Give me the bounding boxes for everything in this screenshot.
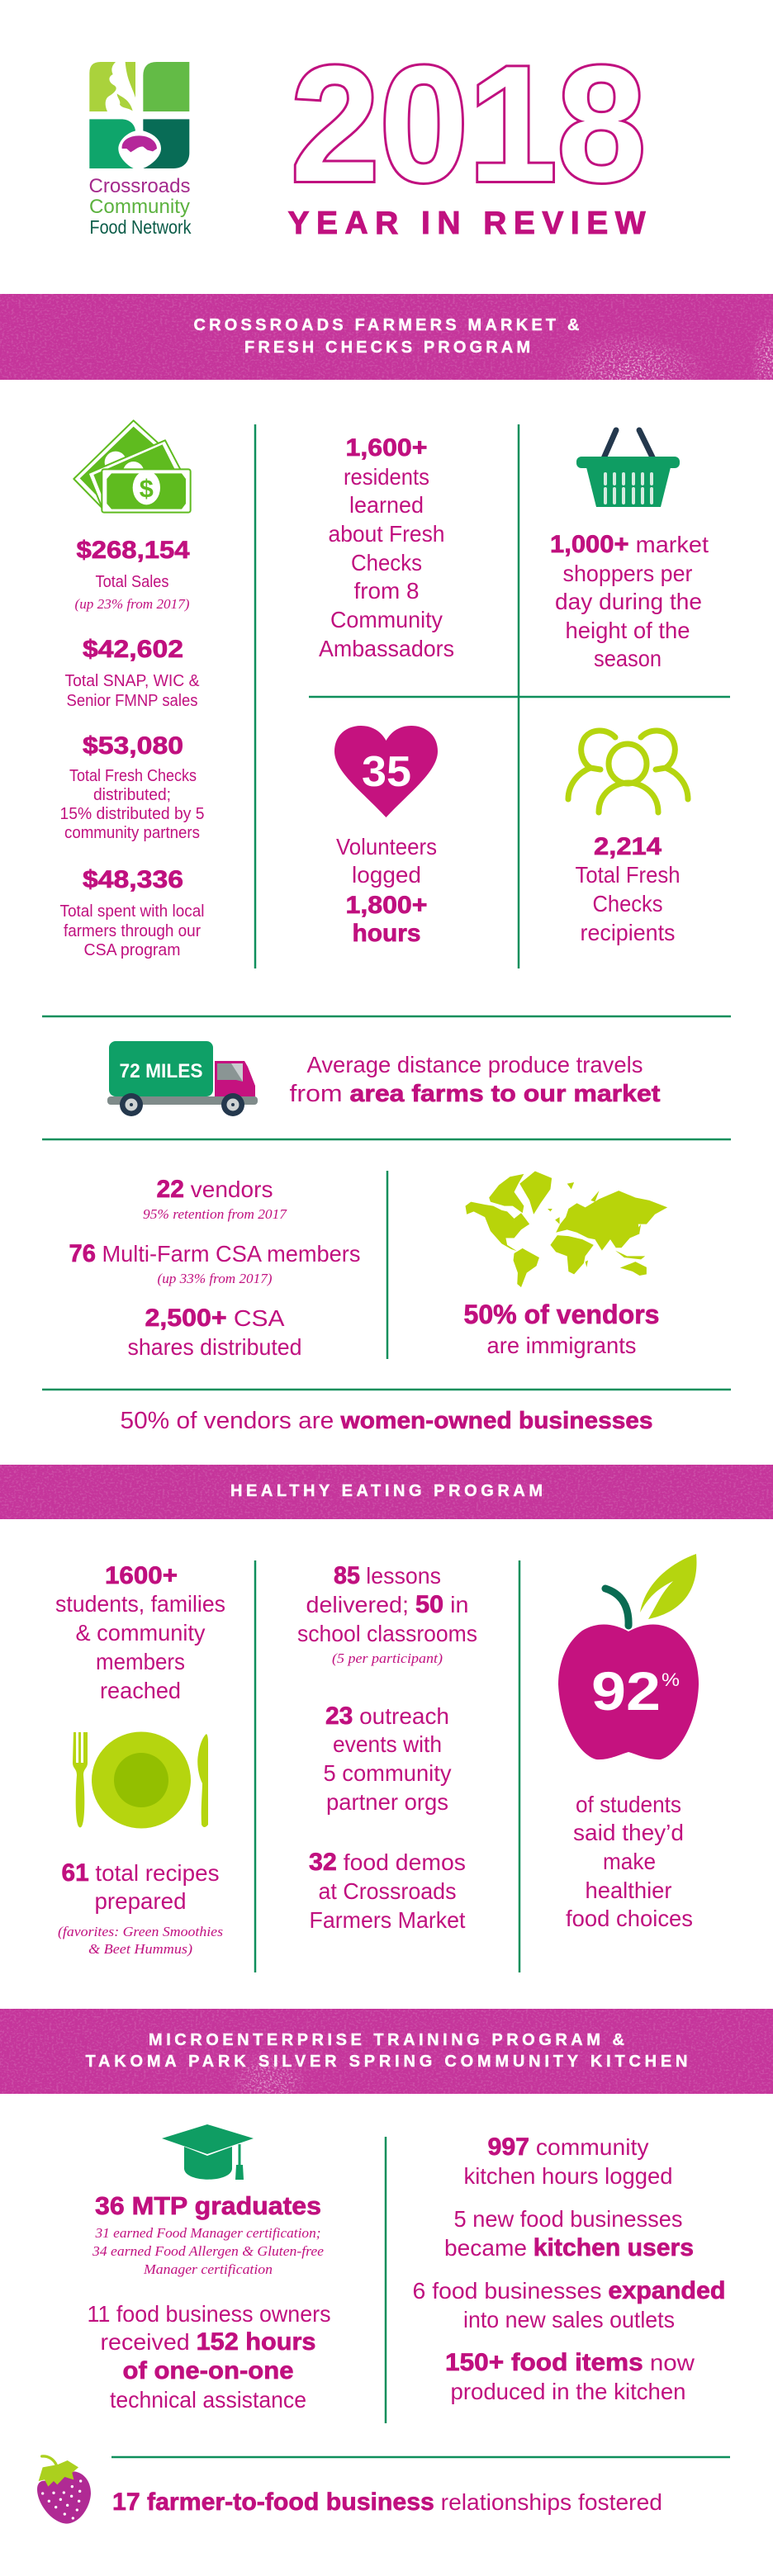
panel: ambassadors: residents [344,464,429,490]
panel: lessons, outreach, demos: school classrooms [297,1621,477,1646]
panel: volunteers [336,834,437,947]
panel: community kitchen stats [413,2133,725,2404]
panel: MTP graduates: of one-on-one [122,2357,294,2384]
icon: plate with fork and knife [73,1732,208,1828]
panel: lessons, outreach, demos: 5 community [324,1760,451,1786]
panel: sales figures: community partners [64,824,200,842]
logo: Crossroads Community Food Network [89,62,192,238]
panel: students reached: reached [100,1678,181,1703]
panel: students reached: students, families [55,1591,225,1617]
panel: market shoppers [550,531,709,671]
panel: vendors and CSA: 22 vendors [157,1176,273,1203]
panel: community kitchen stats: 5 new food businesses [454,2206,682,2232]
panel: vendors and CSA: 76 Multi-Farm CSA members [69,1240,360,1267]
panel: healthier food choices [566,1792,693,1931]
panel: healthier food choices: food choices [566,1906,693,1931]
panel: sales figures [59,537,205,959]
panel: sales figures: $48,336 [83,866,183,893]
icon: heart with 35: 35 [362,748,411,796]
panel: recipes: (favorites: Green Smoothies [58,1924,223,1939]
panel: recipes: prepared [94,1888,187,1914]
panel: immigrant vendors [464,1300,659,1358]
panel: market shoppers: shoppers per [563,561,692,586]
panel: community kitchen stats: 997 community [487,2133,649,2161]
icon: strawberry [37,2456,91,2524]
panel: sales figures: Total Fresh Checks [69,767,197,785]
panel: sales figures: 15% distributed by 5 [59,805,205,823]
panel: lessons, outreach, demos [297,1562,477,1933]
text: average produce distance: Average distance produce travels [307,1052,643,1077]
panel: vendors and CSA [69,1176,360,1360]
panel: ambassadors: about Fresh [329,521,444,547]
logo: Crossroads Community Food Network: Food Network [89,216,192,238]
icon: money: $ [140,475,154,503]
panel: vendors and CSA: 95% retention from 2017 [143,1206,288,1222]
panel: sales figures: distributed; [93,786,171,804]
panel: sales figures: $268,154 [76,537,190,564]
panel: MTP graduates: 31 earned Food Manager certification; [94,2225,320,2241]
panel: volunteers: logged [352,862,421,888]
panel: sales figures: Total SNAP, WIC & [64,672,200,690]
panel: students reached: 1600+ [105,1562,178,1589]
panel: volunteers: hours [352,920,421,947]
panel: market shoppers: day during the [555,589,702,614]
icon: heart with 35 [334,726,438,817]
panel: lessons, outreach, demos: (5 per participant) [332,1650,443,1666]
subtitle: year in review: YEAR IN REVIEW [287,206,646,241]
panel: sales figures: Total Sales [96,573,168,591]
panel: market shoppers: season [594,646,662,671]
logo: Crossroads Community Food Network: Community [89,196,190,218]
panel: immigrant vendors: are immigrants [487,1333,636,1358]
icon: truck 72 miles: 72 MILES [119,1060,203,1082]
panel: recipes: 61 total recipes [61,1859,220,1887]
icon: graduation cap [162,2124,254,2180]
panel: MTP graduates: 11 food business owners [88,2301,330,2327]
panel: market shoppers: 1,000+ market [550,531,709,558]
panel: community kitchen stats: produced in the kitchen [451,2379,685,2404]
panel: sales figures: Total spent with local [59,902,205,921]
banner: farmers market and fresh checks [0,294,773,380]
panel: volunteers: 1,800+ [345,892,428,919]
panel: community kitchen stats: 6 food businesses expanded [413,2277,725,2304]
panel: students reached [55,1562,225,1703]
panel: sales figures: CSA program [84,941,180,959]
text: women-owned businesses: 50% of vendors are women-owned businesses [121,1408,652,1434]
panel: MTP graduates: 36 MTP graduates [95,2191,321,2220]
panel: immigrant vendors: 50% of vendors [464,1300,659,1329]
text: average produce distance [289,1052,661,1107]
logo: Crossroads Community Food Network: Crossroads [89,175,190,197]
panel: recipes [58,1859,223,1957]
panel: community kitchen stats: became kitchen users [444,2234,694,2261]
panel: sales figures: Senior FMNP sales [66,692,198,710]
panel: vendors and CSA: (up 33% from 2017) [157,1271,273,1286]
icon: basket [576,430,680,507]
banner: healthy eating program [0,1465,773,1519]
panel: volunteers: Volunteers [336,834,437,859]
panel: fresh checks recipients [575,833,681,945]
icon: money [74,420,191,513]
panel: lessons, outreach, demos: events with [333,1731,442,1757]
panel: lessons, outreach, demos: at Crossroads [319,1878,456,1904]
banner: microenterprise and community kitchen: MICROENTERPRISE TRAINING PROGRAM & [149,2031,624,2049]
panel: sales figures: (up 23% from 2017) [74,596,190,612]
panel: ambassadors: 1,600+ [345,434,428,462]
panel: students reached: members [96,1649,185,1674]
panel: lessons, outreach, demos: 32 food demos [309,1849,466,1876]
panel: fresh checks recipients: 2,214 [594,833,662,860]
banner: healthy eating program: HEALTHY EATING PROGRAM [230,1482,543,1500]
panel: ambassadors: Community [330,607,443,632]
panel: fresh checks recipients: Checks [593,891,662,916]
icon: apple 92%: 92 [591,1660,661,1721]
panel: vendors and CSA: 2,500+ CSA [145,1305,285,1332]
panel: vendors and CSA: shares distributed [127,1334,302,1360]
title: 2018: 2018 [291,32,646,216]
panel: MTP graduates: technical assistance [110,2387,306,2413]
panel: healthier food choices: healthier [585,1878,672,1903]
panel: sales figures: $53,080 [83,732,183,760]
panel: MTP graduates: 34 earned Food Allergen & Gluten-free [92,2243,324,2259]
icon: truck 72 miles [107,1041,258,1116]
panel: lessons, outreach, demos: Farmers Market [309,1907,466,1933]
panel: market shoppers: height of the [565,618,690,643]
panel: community kitchen stats: 150+ food items now [445,2349,695,2376]
panel: lessons, outreach, demos: delivered; 50 in [306,1591,469,1618]
panel: ambassadors [319,434,454,661]
panel: healthier food choices: said they’d [573,1820,684,1845]
panel: community kitchen stats: kitchen hours logged [464,2163,672,2189]
banner: microenterprise and community kitchen [0,2009,773,2094]
text: average produce distance: from area farms to our market [289,1081,661,1107]
panel: ambassadors: Ambassadors [319,636,454,661]
banner: farmers market and fresh checks: CROSSROADS FARMERS MARKET & [193,316,580,334]
panel: MTP graduates: received 152 hours [101,2328,315,2356]
panel: community kitchen stats: into new sales outlets [463,2307,675,2332]
panel: healthier food choices: make [603,1849,656,1874]
banner: microenterprise and community kitchen: TAKOMA PARK SILVER SPRING COMMUNITY KITCHEN [86,2053,687,2071]
panel: MTP graduates: Manager certification [143,2261,273,2277]
panel: ambassadors: learned [349,492,424,518]
panel: lessons, outreach, demos: partner orgs [326,1789,448,1815]
panel: recipes: & Beet Hummus) [88,1941,192,1957]
panel: lessons, outreach, demos: 23 outreach [325,1702,449,1730]
icon: people [568,731,688,812]
panel: fresh checks recipients: recipients [580,920,676,945]
icon: apple 92% [558,1554,699,1759]
panel: sales figures: farmers through our [64,922,201,940]
panel: fresh checks recipients: Total Fresh [575,862,681,888]
panel: MTP graduates [88,2191,330,2413]
panel: ambassadors: Checks [351,550,422,575]
text: farmer-to-food relationships: 17 farmer-to-food business relationships fostered [112,2488,662,2516]
panel: sales figures: $42,602 [83,636,183,663]
panel: healthier food choices: of students [576,1792,681,1817]
icon: apple 92%: % [662,1669,680,1690]
panel: ambassadors: from 8 [353,578,420,604]
icon: world map [466,1171,667,1287]
banner: farmers market and fresh checks: FRESH CHECKS PROGRAM [244,339,530,357]
panel: lessons, outreach, demos: 85 lessons [334,1562,441,1589]
panel: students reached: & community [76,1620,205,1646]
